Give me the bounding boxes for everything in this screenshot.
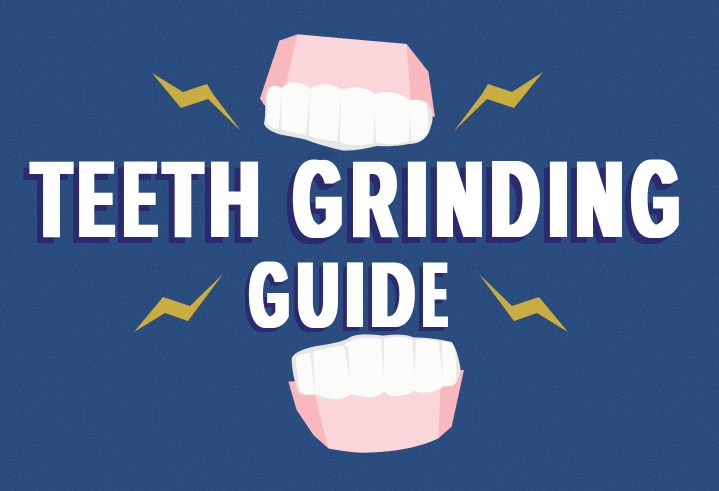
- title shadow: TEETH GRINDING: G: [288, 144, 336, 267]
- title line two: GUIDE: E: [424, 241, 446, 347]
- title line one: TEETH GRINDING: [33, 137, 679, 261]
- title line one: TEETH GRINDING: I: [407, 138, 427, 261]
- title line one: TEETH GRINDING: G: [632, 137, 679, 261]
- title shadow: TEETH GRINDING: R: [347, 144, 390, 267]
- title line one: TEETH GRINDING: G: [294, 138, 342, 261]
- title shadow: TEETH GRINDING: H: [205, 145, 253, 267]
- title line one: TEETH GRINDING: I: [550, 137, 567, 260]
- title shadow: GUIDE: D: [368, 246, 410, 351]
- lightning bolt: lower right: [479, 274, 568, 332]
- title shadow: TEETH GRINDING: I: [401, 144, 421, 267]
- title shadow: GUIDE: G: [246, 246, 284, 351]
- title line one: TEETH GRINDING: E: [125, 138, 156, 260]
- title shadow: TEETH GRINDING: I: [544, 143, 561, 266]
- icon: upper teeth: [260, 34, 435, 151]
- title line one: TEETH GRINDING: T: [165, 138, 201, 261]
- lightning bolt: upper right: [454, 72, 543, 131]
- title line one: TEETH GRINDING: D: [492, 138, 539, 261]
- title shadow: TEETH GRINDING: T: [27, 143, 64, 266]
- title shadow: TEETH GRINDING: T: [159, 144, 195, 267]
- title shadow: TEETH GRINDING: G: [626, 143, 673, 267]
- title line two: GUIDE: U: [298, 243, 338, 348]
- title shadow: GUIDE: U: [294, 247, 334, 352]
- title line two: GUIDE: I: [346, 242, 364, 347]
- title shadow: TEETH GRINDING: E: [119, 144, 150, 266]
- title line one: TEETH GRINDING: R: [353, 138, 396, 261]
- title line two: GUIDE: D: [372, 242, 414, 347]
- title line one: TEETH GRINDING: H: [211, 139, 259, 261]
- title shadow: TEETH GRINDING: [27, 143, 673, 267]
- title shadow: GUIDE: [246, 245, 442, 352]
- title shadow: TEETH GRINDING: E: [74, 145, 107, 267]
- icon: lower teeth: [288, 334, 464, 453]
- title shadow: TEETH GRINDING: D: [486, 144, 533, 267]
- title line one: TEETH GRINDING: T: [33, 137, 70, 260]
- lightning bolt: upper left: [152, 73, 241, 131]
- title line one: TEETH GRINDING: E: [80, 139, 113, 261]
- title shadow: GUIDE: E: [420, 245, 442, 351]
- bite mark in title letter G: [308, 150, 334, 160]
- title: [27, 137, 679, 352]
- title shadow: GUIDE: I: [342, 246, 360, 351]
- title shadow: TEETH GRINDING: N: [571, 144, 616, 266]
- title line two: GUIDE: [250, 241, 446, 348]
- title line two: GUIDE: G: [250, 242, 288, 347]
- title line one: TEETH GRINDING: N: [577, 138, 622, 260]
- title line one: TEETH GRINDING: N: [437, 138, 482, 260]
- title shadow: TEETH GRINDING: N: [431, 144, 476, 266]
- lightning bolt: lower left: [134, 274, 223, 332]
